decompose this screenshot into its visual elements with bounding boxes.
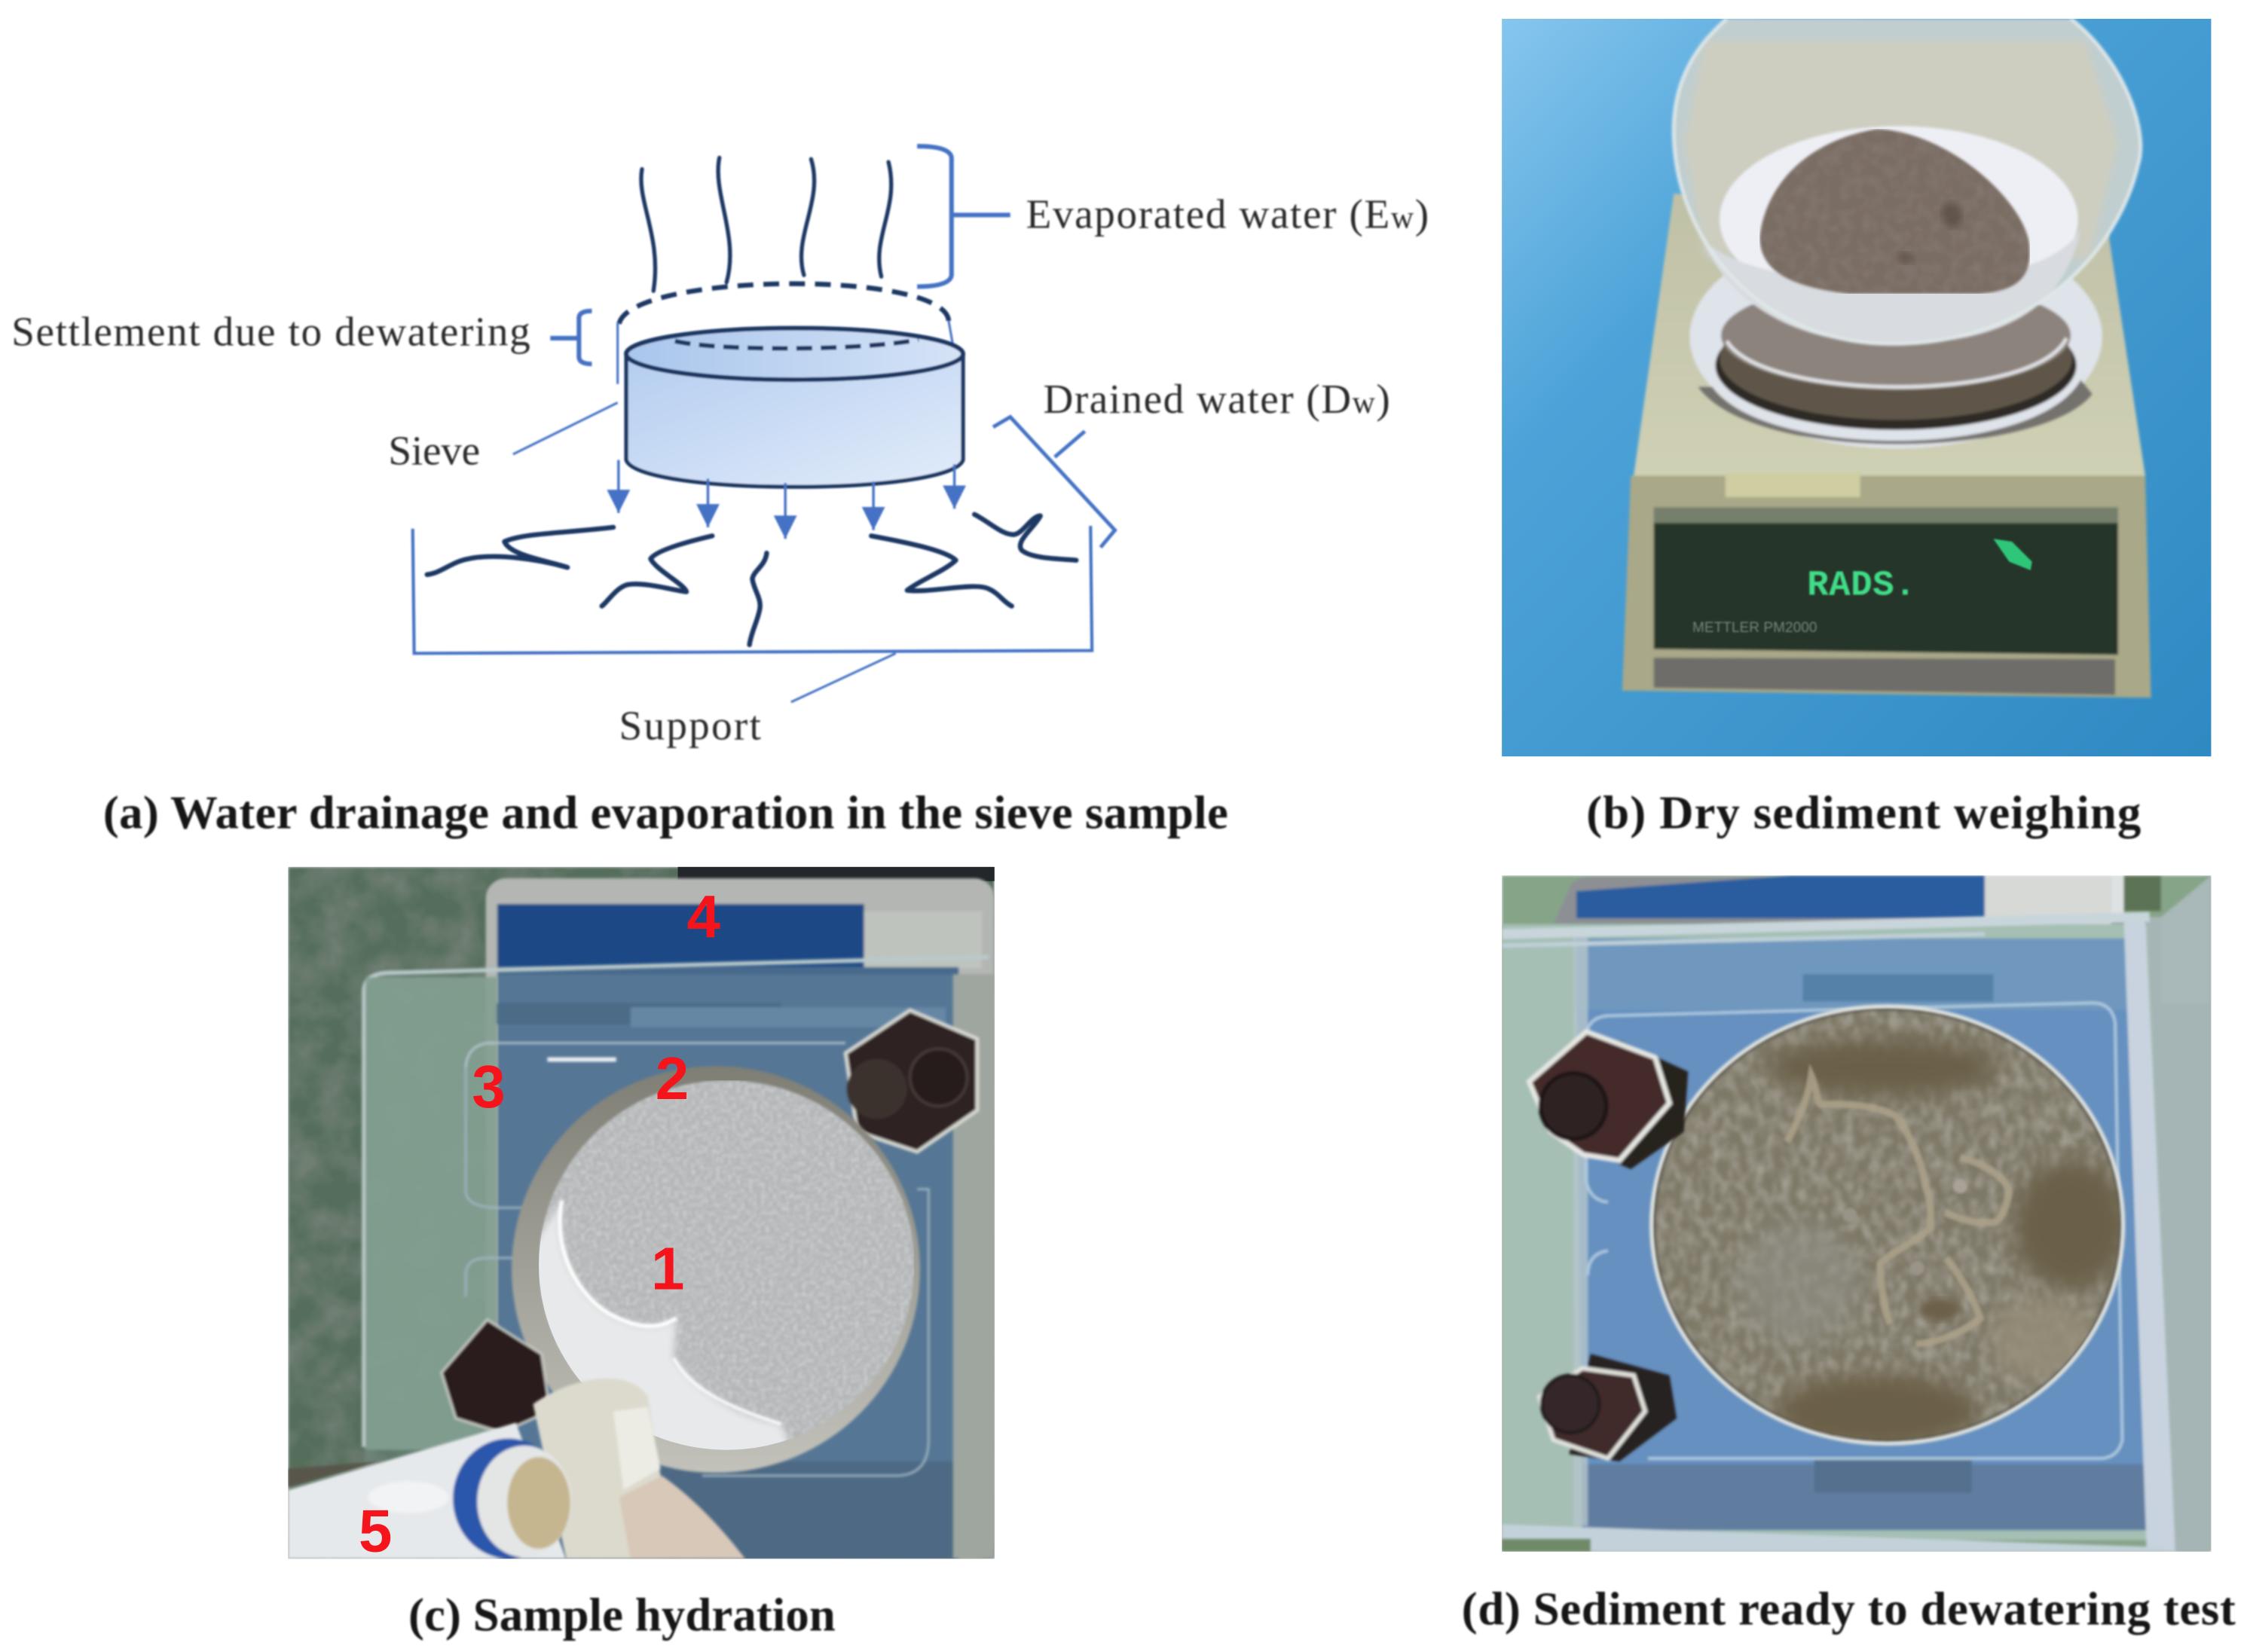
caption: panel d: (d) Sediment ready to dewatering test — [1462, 1583, 2236, 1635]
panel: (c) sample hydration photo — [288, 867, 995, 1565]
icon: hexagonal weight upper — [1529, 1031, 1688, 1169]
background: blue table — [1502, 19, 2211, 756]
icon: hexagonal weight top right — [845, 1010, 977, 1152]
label: drained water: Drained water (Dw) — [1043, 376, 1390, 422]
labels: numbered parts: 3 — [472, 1053, 506, 1120]
bracket: drained water — [993, 417, 1115, 548]
icon: transparent plastic box — [361, 957, 995, 1559]
background: green floor — [288, 867, 995, 1559]
label: evaporated water: Evaporated water (Ew) — [1026, 191, 1429, 237]
background: floor and balance — [1502, 875, 2211, 1552]
arrows: drained water — [619, 460, 955, 539]
balance display text: RADS. — [1807, 565, 1916, 606]
labels: numbered parts: 2 — [656, 1045, 689, 1112]
icon: evaporation wavy lines — [641, 157, 891, 291]
labels: numbered parts: 4 — [687, 883, 720, 950]
icon: initial sediment level dashed outline — [619, 284, 949, 324]
icon: glass bowl — [1674, 19, 2141, 344]
labels: numbered parts: 5 — [359, 1498, 392, 1565]
panel: (a) water drainage and evaporation diagram — [11, 146, 1429, 748]
icon: support tray — [413, 526, 1092, 653]
caption: panel a: (a) Water drainage and evaporation in the sieve sample — [103, 786, 1228, 838]
icon: balance under the box — [486, 878, 995, 1559]
label: sieve: Sieve — [388, 427, 480, 473]
icon: transparent plastic box — [1502, 875, 2211, 1552]
balance display text: METTLER PM2000 — [1692, 620, 1817, 636]
panel: (b) dry sediment weighing photo — [1502, 19, 2211, 756]
leader line: support — [791, 653, 896, 702]
labels: numbered parts — [359, 883, 720, 1565]
icon: hexagonal weight bottom left — [442, 1320, 550, 1433]
icon: weighing platter — [1688, 274, 2104, 450]
labels: numbered parts: 1 — [651, 1235, 684, 1302]
icon: side settlement guide lines — [618, 321, 957, 384]
icon: dry sediment — [1759, 129, 2030, 294]
icon: sieve with wet sediment — [1649, 1004, 2128, 1447]
caption: panel c: (c) Sample hydration — [408, 1588, 836, 1641]
icon: sieve with hydrated sediment — [512, 1066, 920, 1476]
icon: drainage squiggles — [427, 515, 1076, 645]
balance display text — [1692, 539, 2032, 636]
panel: (d) sediment ready to dewatering test photo — [1502, 875, 2211, 1552]
icon: hexagonal weight lower — [1539, 1354, 1677, 1461]
label: settlement due to dewatering: Settlement due to dewatering — [11, 308, 530, 354]
label: support: Support — [619, 702, 761, 748]
icon: sieve cylinder — [626, 328, 963, 487]
icon: water jug — [288, 1423, 572, 1559]
icon: balance body — [1622, 194, 2151, 698]
bracket: settlement — [550, 311, 592, 364]
leader line: sieve — [513, 403, 618, 454]
bracket: evaporated water — [917, 146, 1010, 286]
caption: panel b: (b) Dry sediment weighing — [1586, 786, 2141, 838]
icon: gloved hand and cloth — [533, 1379, 745, 1559]
